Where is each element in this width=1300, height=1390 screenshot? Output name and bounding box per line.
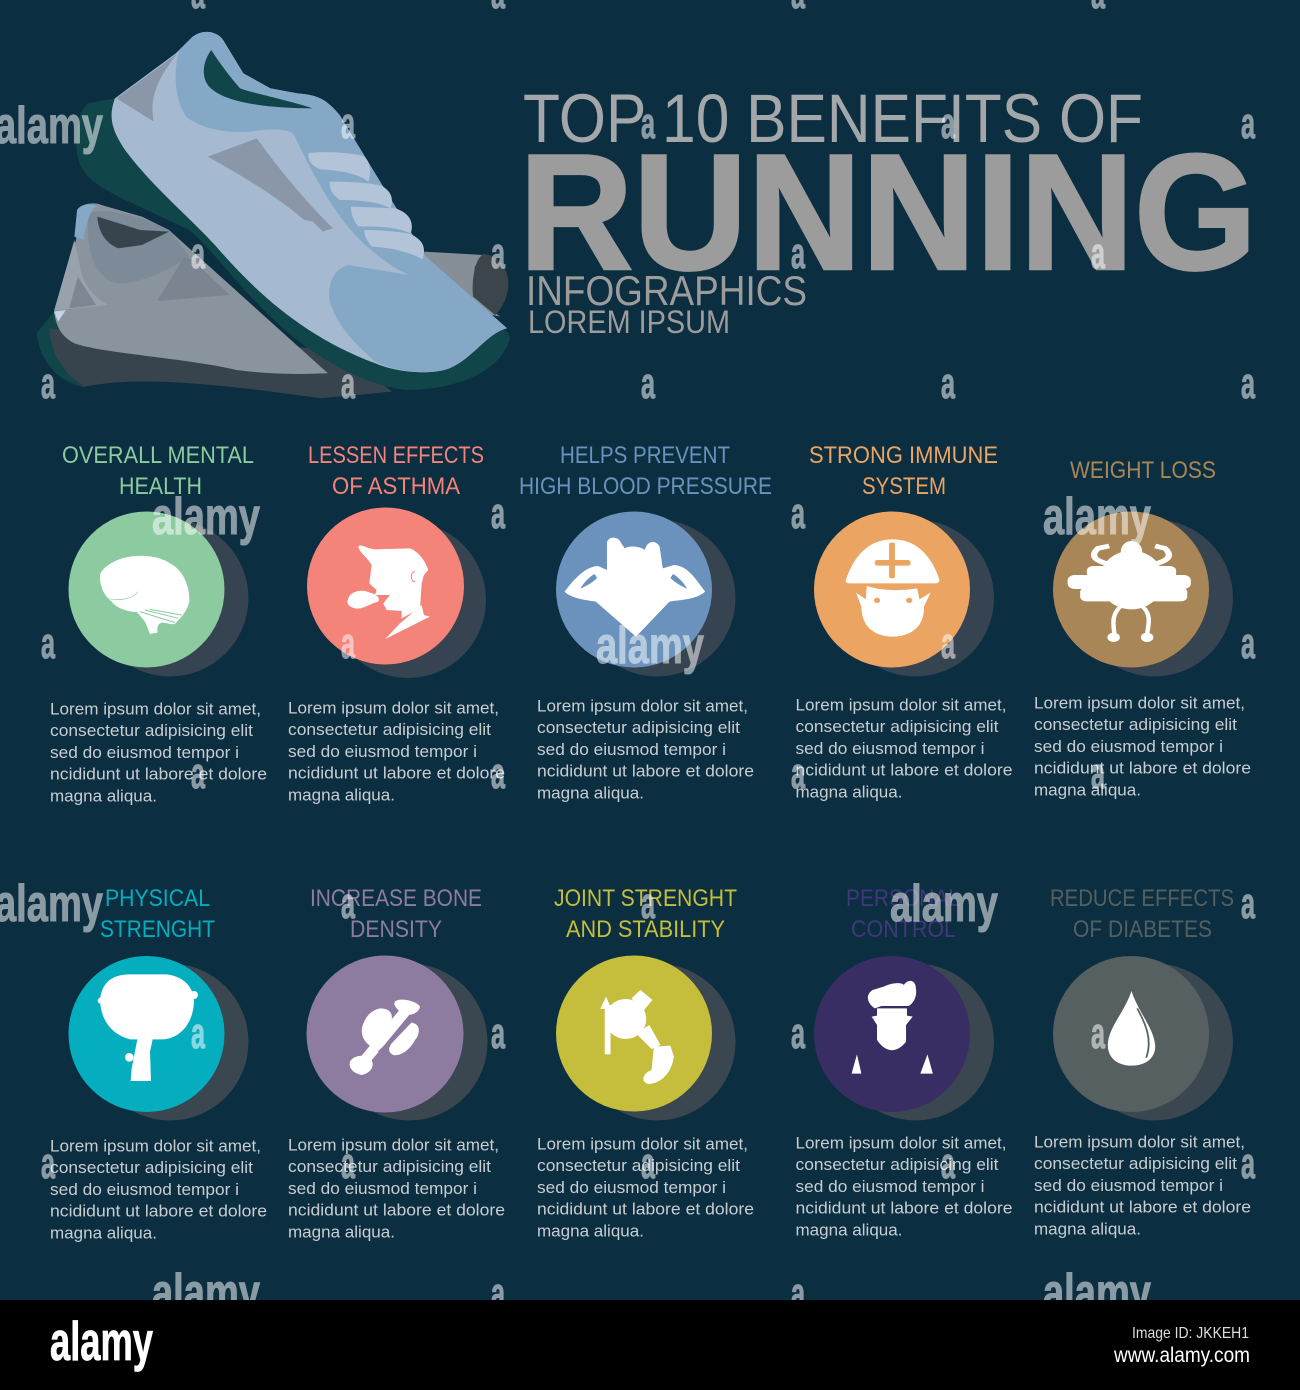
watermark overlay: a bbox=[341, 359, 355, 408]
body text bbox=[537, 1136, 754, 1240]
heading bbox=[310, 885, 482, 943]
body text: magna aliqua. bbox=[537, 784, 644, 802]
heading: SYSTEM bbox=[862, 473, 946, 500]
circle bbox=[68, 512, 224, 668]
body text: consectetur adipisicing elit bbox=[1034, 1155, 1237, 1173]
body text bbox=[1034, 694, 1251, 800]
circle shadow bbox=[92, 964, 248, 1120]
body text: Lorem ipsum dolor sit amet, bbox=[50, 1138, 261, 1156]
body text: sed do eiusmod tempor i bbox=[288, 1180, 477, 1198]
watermark overlay: a bbox=[1241, 879, 1255, 928]
icon: water drop bbox=[1108, 991, 1155, 1066]
heading: OF ASTHMA bbox=[332, 473, 460, 500]
body text: consectetur adipisicing elit bbox=[50, 1159, 253, 1177]
body text: consectetur adipisicing elit bbox=[50, 722, 253, 740]
front shoe upper bbox=[112, 32, 507, 372]
watermark overlay: alamy bbox=[596, 617, 704, 675]
watermark overlay: a bbox=[791, 489, 805, 538]
body text: Lorem ipsum dolor sit amet, bbox=[796, 696, 1006, 714]
icon: bone bbox=[350, 1000, 420, 1075]
circle shadow bbox=[92, 520, 248, 676]
body text: Lorem ipsum dolor sit amet, bbox=[1034, 1134, 1245, 1152]
title line: top 10 benefits of: TOP 10 BENEFITS OF bbox=[523, 80, 1143, 157]
watermark overlay: a bbox=[341, 619, 355, 668]
watermark overlay: a bbox=[491, 489, 505, 538]
watermark overlay: a bbox=[491, 229, 505, 278]
watermark overlay: a bbox=[41, 359, 55, 408]
watermark overlay: a bbox=[491, 1269, 505, 1318]
body text: Lorem ipsum dolor sit amet, bbox=[537, 698, 748, 716]
heading bbox=[308, 442, 484, 500]
watermark overlay: a bbox=[641, 1139, 655, 1188]
body text: ncididunt ut labore et dolore bbox=[50, 1203, 267, 1221]
heading: WEIGHT LOSS bbox=[1070, 457, 1216, 484]
illustration: running shoes bbox=[37, 32, 510, 398]
footer bar bbox=[0, 1300, 1300, 1390]
body text: magna aliqua. bbox=[50, 788, 157, 806]
watermark overlay: a bbox=[491, 749, 505, 798]
heading: LESSEN EFFECTS bbox=[308, 442, 484, 469]
image id: Image ID: JKKEH1 bbox=[1132, 1325, 1249, 1342]
heading: HEALTH bbox=[119, 473, 202, 500]
body text: consectetur adipisicing elit bbox=[537, 719, 740, 737]
body text: consectetur adipisicing elit bbox=[1034, 716, 1237, 734]
icon: knee joint bbox=[600, 990, 674, 1084]
body text: sed do eiusmod tempor i bbox=[288, 743, 477, 761]
footer logo: alamy bbox=[50, 1310, 153, 1372]
watermark overlay: a bbox=[791, 749, 805, 798]
watermark overlay: a bbox=[641, 879, 655, 928]
body text bbox=[288, 1136, 505, 1242]
heading bbox=[846, 885, 960, 943]
body text: magna aliqua. bbox=[537, 1222, 644, 1240]
body text: ncididunt ut labore et dolore bbox=[1034, 1199, 1251, 1217]
heading: HIGH BLOOD PRESSURE bbox=[519, 473, 772, 500]
front shoe collar and toe panel bbox=[176, 32, 507, 372]
subtitle: lorem ipsum: LOREM IPSUM bbox=[528, 304, 730, 340]
icon: coughing man bbox=[347, 546, 430, 639]
heading bbox=[100, 885, 215, 943]
heading: HELPS PREVENT bbox=[560, 442, 730, 469]
watermark overlay: a bbox=[941, 99, 955, 148]
panel: strong immune system bbox=[796, 442, 1012, 802]
body text bbox=[50, 700, 267, 806]
panel: lessen effects of asthma bbox=[288, 442, 505, 804]
body text: consectetur adipisicing elit bbox=[537, 1157, 740, 1175]
side stripe bbox=[208, 138, 333, 232]
watermark overlay: a bbox=[941, 359, 955, 408]
watermark overlay: a bbox=[791, 229, 805, 278]
watermark overlay: a bbox=[191, 749, 205, 798]
watermark overlay: a bbox=[641, 359, 655, 408]
body text: consectetur adipisicing elit bbox=[796, 718, 999, 736]
watermark overlay: alamy bbox=[152, 1264, 260, 1322]
watermark overlay: alamy bbox=[890, 875, 998, 933]
heading: STRONG IMMUNE bbox=[809, 442, 998, 469]
body text: sed do eiusmod tempor i bbox=[1034, 738, 1223, 756]
body text: consectetur adipisicing elit bbox=[288, 721, 491, 739]
panel: personal control bbox=[796, 885, 1012, 1240]
watermark overlay: a bbox=[1241, 619, 1255, 668]
body text: ncididunt ut labore et dolore bbox=[796, 762, 1012, 780]
watermark overlay: a bbox=[1091, 1009, 1105, 1058]
body text: magna aliqua. bbox=[288, 786, 395, 804]
circle shadow bbox=[837, 964, 994, 1120]
body text: Lorem ipsum dolor sit amet, bbox=[1034, 694, 1245, 712]
watermark overlay: alamy bbox=[1043, 488, 1151, 546]
watermark overlay: a bbox=[491, 1009, 505, 1058]
watermark overlay: a bbox=[1091, 749, 1105, 798]
body text: ncididunt ut labore et dolore bbox=[537, 1201, 754, 1219]
circle shadow bbox=[1076, 964, 1233, 1120]
circle shadow bbox=[837, 520, 994, 676]
watermark overlay: a bbox=[341, 879, 355, 928]
heading: PERSONAL bbox=[846, 885, 960, 912]
title block bbox=[519, 80, 1257, 340]
watermark overlay: a bbox=[191, 229, 205, 278]
circle bbox=[306, 956, 464, 1112]
watermark overlay: a bbox=[41, 619, 55, 668]
circle bbox=[1053, 512, 1209, 668]
body text: ncididunt ut labore et dolore bbox=[288, 765, 505, 783]
laces bbox=[308, 152, 424, 259]
heading: OF DIABETES bbox=[1073, 916, 1212, 943]
body text: consectetur adipisicing elit bbox=[288, 1158, 491, 1176]
watermark overlay: a bbox=[1241, 359, 1255, 408]
heading: STRENGHT bbox=[100, 916, 215, 943]
body text: consectetur adipisicing elit bbox=[796, 1156, 999, 1174]
panel: joint strenght and stability bbox=[537, 885, 754, 1240]
watermark overlay: a bbox=[41, 1139, 55, 1188]
body text: sed do eiusmod tempor i bbox=[537, 1179, 726, 1197]
icon: helmeted head bbox=[846, 539, 940, 637]
body text: sed do eiusmod tempor i bbox=[796, 1178, 984, 1196]
heading: PHYSICAL bbox=[105, 885, 210, 912]
heading bbox=[554, 885, 737, 943]
heading: CONTROL bbox=[851, 916, 956, 943]
panel: helps prevent high blood pressure bbox=[519, 442, 772, 802]
body text bbox=[1034, 1134, 1251, 1238]
circle bbox=[814, 512, 970, 668]
circle shadow bbox=[578, 964, 736, 1120]
body text: sed do eiusmod tempor i bbox=[1034, 1177, 1223, 1195]
body text bbox=[796, 1134, 1012, 1240]
heading: DENSITY bbox=[350, 916, 442, 943]
heel panel bbox=[117, 53, 177, 122]
icon: flexed organ shape bbox=[98, 974, 198, 1081]
circle bbox=[556, 956, 712, 1112]
body text: magna aliqua. bbox=[796, 784, 902, 802]
panel: increase bone density bbox=[288, 885, 505, 1242]
circle shadow bbox=[330, 522, 486, 678]
watermark overlay: a bbox=[1241, 99, 1255, 148]
website: www.alamy.com bbox=[1113, 1344, 1250, 1367]
body text: Lorem ipsum dolor sit amet, bbox=[796, 1134, 1006, 1152]
watermark overlay: a bbox=[1241, 1139, 1255, 1188]
circle shadow bbox=[578, 520, 736, 676]
body text: ncididunt ut labore et dolore bbox=[288, 1202, 505, 1220]
watermark overlay: a bbox=[1091, 229, 1105, 278]
body text: magna aliqua. bbox=[50, 1224, 157, 1242]
circle bbox=[68, 956, 224, 1112]
panel: reduce effects of diabetes bbox=[1034, 885, 1251, 1238]
heading: INCREASE BONE bbox=[310, 885, 482, 912]
watermark overlay: a bbox=[641, 99, 655, 148]
watermark overlay: alamy bbox=[1043, 1264, 1151, 1322]
heading: OVERALL MENTAL bbox=[62, 442, 254, 469]
circle bbox=[556, 512, 712, 668]
watermark overlay: a bbox=[941, 1139, 955, 1188]
heading bbox=[62, 442, 254, 500]
circle bbox=[307, 508, 464, 664]
body text: ncididunt ut labore et dolore bbox=[50, 766, 267, 784]
icon: brain bbox=[100, 556, 189, 634]
panel: overall mental health bbox=[50, 442, 267, 806]
circle bbox=[814, 956, 970, 1112]
heading bbox=[519, 442, 772, 500]
body text: ncididunt ut labore et dolore bbox=[796, 1200, 1012, 1218]
circle shadow bbox=[330, 964, 488, 1120]
subtitle: infographics: INFOGRAPHICS bbox=[526, 267, 807, 314]
body text: Lorem ipsum dolor sit amet, bbox=[288, 700, 499, 718]
watermark overlay: a bbox=[341, 1139, 355, 1188]
icon: overweight figure bbox=[1068, 541, 1191, 642]
body text: magna aliqua. bbox=[1034, 1220, 1141, 1238]
title word: running: RUNNING bbox=[519, 120, 1257, 304]
heading: REDUCE EFFECTS bbox=[1050, 885, 1234, 912]
body text: Lorem ipsum dolor sit amet, bbox=[537, 1136, 748, 1154]
body text bbox=[50, 1138, 267, 1242]
shoe opening bbox=[204, 50, 313, 108]
circle bbox=[1053, 956, 1209, 1112]
body text: sed do eiusmod tempor i bbox=[50, 1181, 239, 1199]
body text bbox=[796, 696, 1012, 802]
body text: magna aliqua. bbox=[1034, 782, 1141, 800]
body text: sed do eiusmod tempor i bbox=[50, 744, 239, 762]
heading bbox=[809, 442, 998, 500]
body text: Lorem ipsum dolor sit amet, bbox=[50, 700, 261, 718]
heading: AND STABILITY bbox=[566, 916, 725, 943]
body text: magna aliqua. bbox=[796, 1222, 902, 1240]
body text: ncididunt ut labore et dolore bbox=[537, 763, 754, 781]
heading bbox=[1050, 885, 1234, 943]
watermark overlay: a bbox=[791, 1269, 805, 1318]
watermark overlay: a bbox=[941, 619, 955, 668]
body text: magna aliqua. bbox=[288, 1224, 395, 1242]
body text bbox=[288, 700, 505, 804]
icon: muscular torso bbox=[565, 538, 705, 637]
body text: sed do eiusmod tempor i bbox=[537, 741, 726, 759]
panel: weight loss bbox=[1034, 457, 1251, 800]
icon: man silhouette bbox=[852, 981, 933, 1074]
body text bbox=[537, 698, 754, 802]
heading: JOINT STRENGHT bbox=[554, 885, 737, 912]
watermark overlay: alamy bbox=[152, 488, 260, 546]
watermark overlay: a bbox=[791, 1009, 805, 1058]
watermark overlay: a bbox=[191, 1009, 205, 1058]
front shoe sole bbox=[76, 98, 510, 390]
back shoe bbox=[37, 203, 508, 398]
panel: physical strenght bbox=[50, 885, 267, 1242]
body text: ncididunt ut labore et dolore bbox=[1034, 760, 1251, 778]
circle shadow bbox=[1076, 520, 1233, 676]
body text: sed do eiusmod tempor i bbox=[796, 740, 984, 758]
body text: Lorem ipsum dolor sit amet, bbox=[288, 1136, 499, 1154]
watermark overlay: a bbox=[341, 99, 355, 148]
